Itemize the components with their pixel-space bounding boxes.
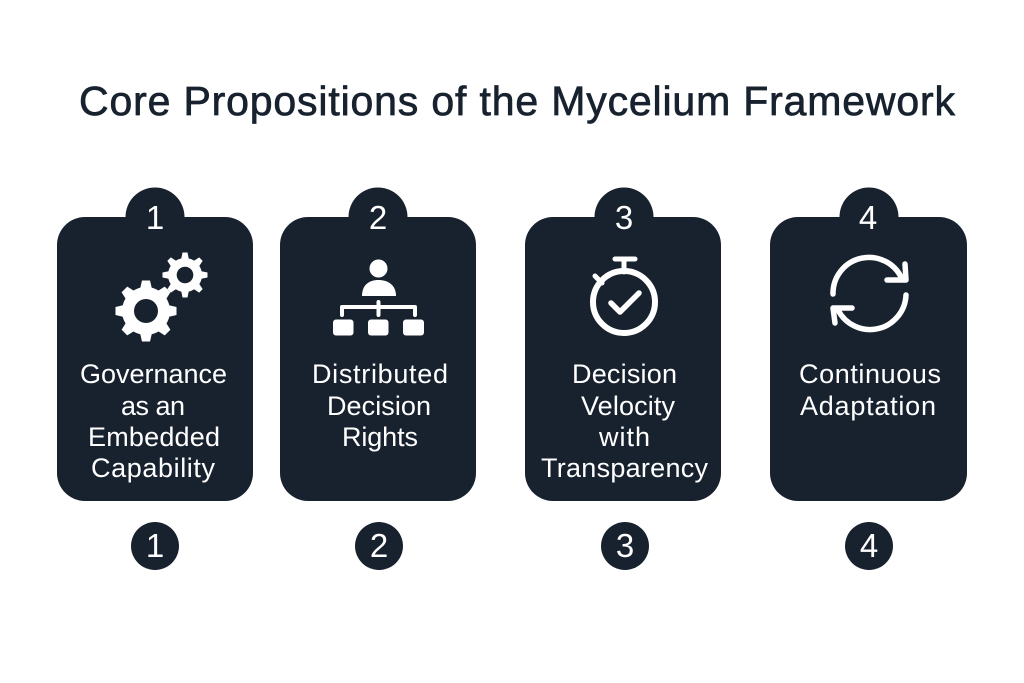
tab number 3: 3 bbox=[615, 199, 633, 236]
card background 1 bbox=[57, 188, 253, 501]
tab number 1: 1 bbox=[146, 199, 164, 236]
bottom marker 2 bbox=[355, 522, 403, 570]
label 1: Capability bbox=[91, 453, 216, 483]
bottom marker 4: 4 bbox=[860, 527, 878, 564]
panel: decision velocity with transparency bbox=[525, 188, 721, 501]
bottom marker 2: 2 bbox=[370, 527, 388, 564]
label 2: Decision bbox=[327, 391, 431, 421]
panel: continuous adaptation bbox=[770, 188, 967, 501]
panel: governance as an embedded capability bbox=[57, 188, 253, 501]
tab number 4: 4 bbox=[859, 199, 877, 236]
bottom marker 1: 1 bbox=[146, 527, 164, 564]
tab number 2: 2 bbox=[369, 199, 387, 236]
title: Core Propositions of the Mycelium Framework bbox=[79, 78, 956, 124]
icon: cycle arrows bbox=[833, 257, 906, 330]
icon: stopwatch with check bbox=[593, 259, 655, 333]
label 1 bbox=[80, 359, 227, 483]
label 4: Adaptation bbox=[800, 391, 936, 421]
label 3: with bbox=[598, 422, 650, 452]
label 3: Transparency bbox=[541, 453, 708, 483]
icon: org hierarchy bbox=[333, 260, 424, 336]
label 3 bbox=[541, 359, 708, 483]
card background 4 bbox=[770, 188, 967, 501]
label 3: Velocity bbox=[581, 391, 676, 421]
bottom marker 4 bbox=[845, 522, 893, 570]
label 1: Embedded bbox=[88, 422, 220, 452]
label 1: as an bbox=[121, 391, 185, 421]
label 2: Rights bbox=[342, 422, 418, 452]
label 1: Governance bbox=[80, 359, 227, 389]
bottom marker 3 bbox=[601, 522, 649, 570]
bottom marker 3: 3 bbox=[616, 527, 634, 564]
icon: gears bbox=[116, 252, 208, 342]
label 4 bbox=[799, 359, 941, 421]
bottom marker 1 bbox=[131, 522, 179, 570]
label 4: Continuous bbox=[799, 359, 941, 389]
card background 2 bbox=[280, 188, 476, 501]
label 2: Distributed bbox=[312, 359, 448, 389]
panel: distributed decision rights bbox=[280, 188, 476, 501]
label 3: Decision bbox=[572, 359, 677, 389]
card background 3 bbox=[525, 188, 721, 501]
label 2 bbox=[312, 359, 448, 452]
